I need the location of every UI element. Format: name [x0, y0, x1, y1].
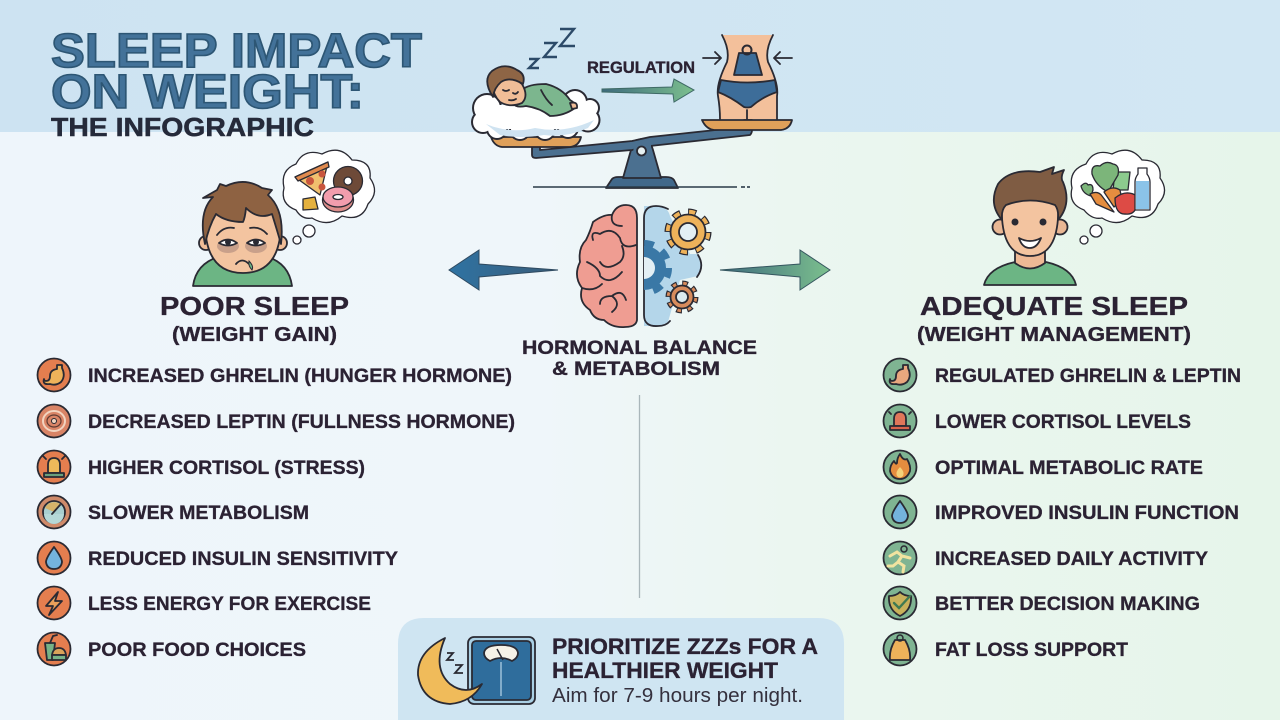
thought bubble: junk food	[283, 150, 375, 244]
icon: blue gear	[644, 240, 672, 294]
character: happy boy with healthy food thought	[984, 150, 1165, 285]
item: higher cortisol: HIGHER CORTISOL (STRESS)	[88, 458, 365, 479]
icon: slim waist with weight	[703, 35, 792, 119]
regulation label: REGULATION	[587, 59, 695, 77]
item: less energy	[38, 586, 371, 620]
call to action text: HEALTHIER WEIGHT	[552, 658, 778, 683]
icon: brain with gears	[577, 205, 708, 327]
panel: call to action	[398, 618, 844, 720]
heading: adequate sleep: (WEIGHT MANAGEMENT)	[917, 324, 1191, 346]
icon: chocolate donut	[334, 166, 362, 196]
item: higher cortisol	[38, 450, 365, 484]
thought bubble: healthy food	[1071, 150, 1165, 244]
icon: sleeping head	[493, 77, 526, 105]
heading: adequate sleep: ADEQUATE SLEEP	[920, 291, 1188, 321]
item: slower metabolism: SLOWER METABOLISM	[88, 503, 309, 524]
balance scale illustration	[471, 29, 792, 188]
item: increased ghrelin: INCREASED GHRELIN (HUNGER HORMONE)	[88, 366, 512, 387]
icon: pizza	[295, 162, 329, 195]
item: decreased leptin: DECREASED LEPTIN (FULLNESS HORMONE)	[88, 412, 515, 433]
item: insulin function: IMPROVED INSULIN FUNCTION	[935, 503, 1239, 524]
icon: cloud outline	[471, 89, 600, 141]
heading: poor sleep	[160, 291, 349, 346]
item: metabolic rate	[884, 450, 1203, 484]
icon: zzz	[529, 29, 575, 68]
icon: apple	[1115, 193, 1137, 214]
title: SLEEP IMPACT	[51, 25, 422, 78]
item: decision making	[884, 586, 1200, 620]
item: fat loss	[884, 632, 1128, 666]
icon: cheese	[303, 197, 318, 210]
item: increased ghrelin	[38, 358, 512, 392]
icon: cloud fill	[473, 91, 598, 139]
icon: left brain hemisphere	[577, 205, 637, 327]
item: reduced insulin sensitivity	[38, 542, 398, 574]
title: ON WEIGHT:	[51, 66, 364, 119]
icon: face	[199, 182, 287, 273]
item: decision making: BETTER DECISION MAKING	[935, 594, 1200, 615]
icon: orange gear	[668, 212, 708, 252]
item: lower cortisol	[884, 404, 1191, 438]
panel: adequate sleep list	[884, 358, 1241, 666]
call to action text: PRIORITIZE ZZZs FOR A	[552, 634, 818, 659]
item: reduced insulin sensitivity: REDUCED INSULIN SENSITIVITY	[88, 549, 398, 570]
arrow: toward adequate sleep	[720, 250, 830, 290]
icon: shirt	[984, 262, 1076, 285]
icon: bathroom scale	[468, 637, 535, 704]
item: daily activity	[884, 542, 1208, 574]
icon: left pan	[491, 137, 581, 147]
icon: crescent moon	[418, 638, 482, 704]
character: tired boy with junk food thought	[193, 150, 375, 286]
icon: neck	[1015, 250, 1045, 268]
icon: pink donut	[322, 187, 354, 212]
heading: hormonal balance	[522, 338, 757, 380]
item: slower metabolism	[38, 496, 309, 528]
item: regulated ghrelin: REGULATED GHRELIN & LEPTIN	[935, 366, 1241, 387]
icon: carrots	[1090, 188, 1122, 212]
title: THE INFOGRAPHIC	[51, 112, 314, 142]
item: metabolic rate: OPTIMAL METABOLIC RATE	[935, 458, 1203, 479]
arrow: regulation	[602, 79, 694, 102]
icon: small brown gear	[668, 284, 696, 310]
item: regulated ghrelin	[884, 358, 1241, 392]
heading: hormonal balance: HORMONAL BALANCE	[522, 338, 757, 359]
icon: right pan	[702, 120, 792, 130]
call to action text	[552, 634, 818, 707]
item: poor food choices: POOR FOOD CHOICES	[88, 640, 306, 661]
item: decreased leptin	[38, 404, 515, 438]
item: poor food choices	[38, 632, 306, 666]
item: insulin function	[884, 496, 1239, 528]
icon: face	[992, 167, 1068, 256]
title	[51, 25, 422, 142]
heading: hormonal balance: & METABOLISM	[552, 359, 720, 380]
item: daily activity: INCREASED DAILY ACTIVITY	[935, 549, 1208, 570]
item: less energy: LESS ENERGY FOR EXERCISE	[88, 594, 371, 615]
icon: moon zzz	[447, 653, 463, 673]
arrow: toward poor sleep	[449, 250, 558, 290]
icon: right brain hemisphere	[644, 206, 702, 326]
panel: poor sleep list	[38, 358, 515, 666]
icon: leafy greens	[1081, 162, 1130, 196]
icon: sleeping person on cloud	[471, 66, 600, 141]
item: lower cortisol: LOWER CORTISOL LEVELS	[935, 412, 1191, 433]
heading: poor sleep: (WEIGHT GAIN)	[172, 324, 337, 346]
icon: water bottle	[1135, 168, 1150, 210]
call to action text: Aim for 7-9 hours per night.	[552, 685, 803, 707]
icon: scale beam and base	[532, 120, 752, 188]
item: fat loss: FAT LOSS SUPPORT	[935, 640, 1128, 661]
heading: poor sleep: POOR SLEEP	[160, 291, 349, 321]
icon: shirt	[193, 257, 292, 286]
icon: green body	[514, 84, 575, 116]
heading: adequate sleep	[917, 291, 1191, 346]
